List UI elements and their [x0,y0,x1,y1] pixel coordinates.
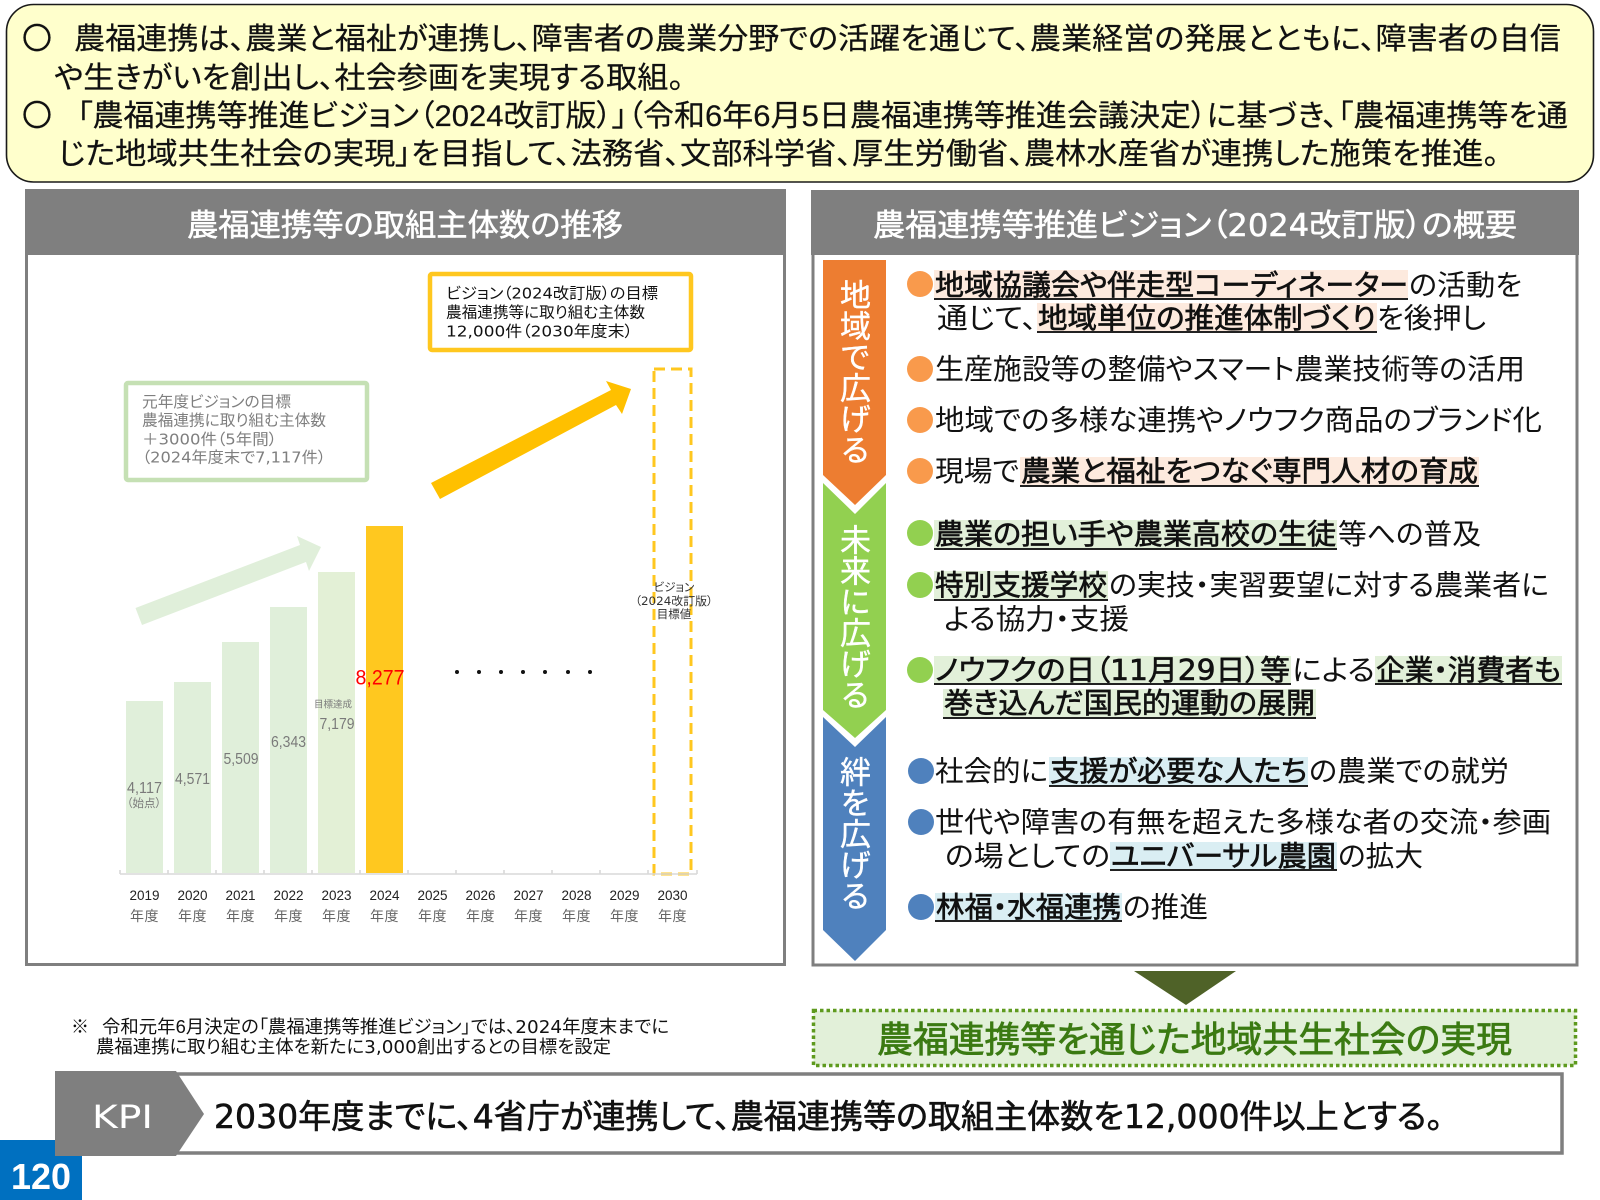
panel: introduction: 〇 [22,100,52,133]
list: regional items: 地域での多様な連携やノウフク商品のブランド化 [935,405,1542,437]
panel: KPI: KPI [92,1098,153,1136]
year axis labels: 2028 [561,888,592,903]
callout: original vision target: 元年度ビジョンの目標 [142,393,291,411]
year axis labels [129,888,688,924]
year axis labels: 年度 [562,908,591,924]
panel: vision overview [811,190,1579,965]
year axis labels: 年度 [130,908,159,924]
arrow: target growth [431,381,631,499]
page number: 120 [11,1156,71,1197]
year axis labels: 2025 [417,888,448,903]
list: bonds items: の拡大 [1338,841,1423,873]
target bar label: ビジョン [654,581,694,594]
year axis labels: 2022 [273,888,304,903]
bar values: 4,571 [175,771,210,788]
year axis labels: 年度 [226,908,255,924]
year axis labels: 年度 [610,908,639,924]
callout: 2024 revised vision target: ビジョン（2024改訂版）の目標 [446,284,658,302]
bar values: 8,277 [356,666,404,690]
callout: 2024 revised vision target: 農福連携等に取り組む主体数 [446,304,645,322]
year axis labels: 2021 [225,888,256,903]
bars [126,526,403,873]
footnote [71,1017,669,1058]
list: bonds items: の場としての [945,841,1110,873]
list: regional items: 地域協議会や伴走型コーディネーター [935,270,1408,302]
bar values: 7,179 [320,716,354,733]
arrow: down to goal [1134,971,1236,1005]
list: regional items: 現場で [935,456,1019,488]
callout: original vision target: （2024年度末で7,117件） [142,448,326,466]
panel: introduction: 「農福連携等推進ビジョン（2024改訂版）」（令和6年6月5日農福連携等推進会議決定）に基づき、「農福連携等を通 [77,100,1568,133]
arrow: spread bonds: 絆を広げる [835,756,870,911]
panel: KPI: 2030年度までに、4省庁が連携して、農福連携等の取組主体数を12,000件以上とする。 [214,1097,1443,1136]
callout: goal: 農福連携等を通じた地域共生社会の実現 [877,1019,1512,1060]
footnote: 農福連携に取り組む主体を新たに 3,000創出するとの目標を設定 [96,1037,611,1058]
target bar label [635,581,713,621]
panel: introduction: じた地域共生社会の実現」を目指して、法務省、文部科学省、厚生労働省、農林水産省が連携した施策を推進。 [58,138,1499,171]
axis [120,870,697,874]
year axis labels: 年度 [418,908,447,924]
bar values: 目標達成 [314,698,352,710]
year axis labels: 2027 [513,888,544,903]
list: bonds items: 林福・水福連携 [936,892,1121,924]
list: bonds items: 社会的に [935,756,1048,788]
list: future items: ノウフクの日（ 11月29日）等 [935,654,1290,687]
year axis labels: 年度 [466,908,495,924]
year axis labels: 2026 [465,888,496,903]
list: future items: 企業・消費者も [1376,655,1561,687]
list: bonds items: 支援が必要な人たち [1050,756,1307,788]
list: regional items: 通じて、 [937,303,1037,335]
bar values: 5,509 [224,751,258,768]
year axis labels: 2023 [321,888,352,903]
list: future items: 特別支援学校 [935,570,1107,602]
footnote: ※ [71,1017,89,1037]
list: future items: よる協力・支援 [944,604,1129,636]
panel: KPI [55,1071,1562,1156]
callout: 2024 revised vision target [430,274,691,350]
footnote: 令和元年6月決定の「農福連携等推進ビジョン」では、 2024年度末までに [102,1017,669,1038]
year axis labels: 年度 [658,908,687,924]
list: future items: 等への普及 [1338,519,1481,551]
callout: goal [814,1010,1576,1066]
year axis labels: 年度 [178,908,207,924]
callout: original vision target: ＋3000件（5年間） [142,430,277,448]
bar values: 6,343 [271,734,306,751]
arrow: past growth [136,536,321,625]
arrow: spread to the future [823,483,886,738]
year axis labels: 2024 [369,888,400,903]
year axis labels: 2029 [609,888,640,903]
bar chart [120,369,713,924]
list: regional items: 農業と福祉をつなぐ専門人材の育成 [1021,456,1478,488]
panel: introduction [6,4,1594,182]
arrow: spread across regions [823,260,886,505]
list: future items: 農業の担い手や農業高校の生徒 [935,519,1336,551]
list: bonds items: の推進 [1123,892,1208,924]
panel: vision overview: 農福連携等推進ビジョン（ 2024改訂版）の概要 [873,208,1517,244]
callout: 2024 revised vision target: 12,000 件（2030年度末） [446,322,633,340]
bar values: 4,117 [127,780,162,797]
year axis labels: 2019 [129,888,160,903]
panel: number of organizations chart [25,189,786,964]
target bar label: 目標値 [657,607,692,621]
list: bonds items [908,756,1551,924]
list: regional items: を後押し [1377,303,1486,335]
list: regional items: の活動を [1409,270,1522,302]
list: bonds items: 世代や障害の有無を超えた多様な者の交流・参画 [935,807,1551,839]
arrow: spread to the future: 未来に広げる [835,524,870,710]
panel: introduction: や生きがいを創出し、社会参画を実現する取組。 [54,62,684,95]
arrow: spread bonds [823,717,886,961]
bar values [127,666,404,810]
year axis labels: 2020 [177,888,208,903]
list: future items: 巻き込んだ国民的運動の展開 [944,688,1315,720]
callout: original vision target [126,383,367,480]
callout: original vision target: 農福連携に取り組む主体数 [142,412,326,430]
continuation dots [455,670,592,674]
year axis labels: 年度 [370,908,399,924]
list: bonds items: ユニバーサル農園 [1111,841,1336,873]
list: regional items [907,270,1542,488]
panel: introduction: 〇 [22,23,52,56]
panel: introduction: 農福連携は、農業と福祉が連携し、障害者の農業分野での活躍を通じて、農業経営の発展とともに、障害者の自信 [74,23,1561,56]
list: regional items: 地域単位の推進体制づくり [1038,303,1376,335]
page number [0,1140,82,1200]
list: future items [907,519,1562,720]
arrow: spread across regions: 地域で広げる [835,279,870,465]
list: future items: の実技・実習要望に対する農業者に [1109,570,1549,602]
list: future items: による [1292,655,1375,687]
year axis labels: 2030 [657,888,688,903]
list: regional items: 生産施設等の整備やスマート農業技術等の活用 [935,354,1525,386]
target bar 2030 [654,369,691,874]
year axis labels: 年度 [274,908,303,924]
bar values: （始点） [127,796,161,810]
target bar label: （2024改訂版） [635,594,713,608]
list: bonds items: の農業での就労 [1309,756,1509,788]
year axis labels: 年度 [514,908,543,924]
panel: number of organizations chart: 農福連携等の取組主体数の推移 [187,208,623,243]
year axis labels: 年度 [322,908,351,924]
